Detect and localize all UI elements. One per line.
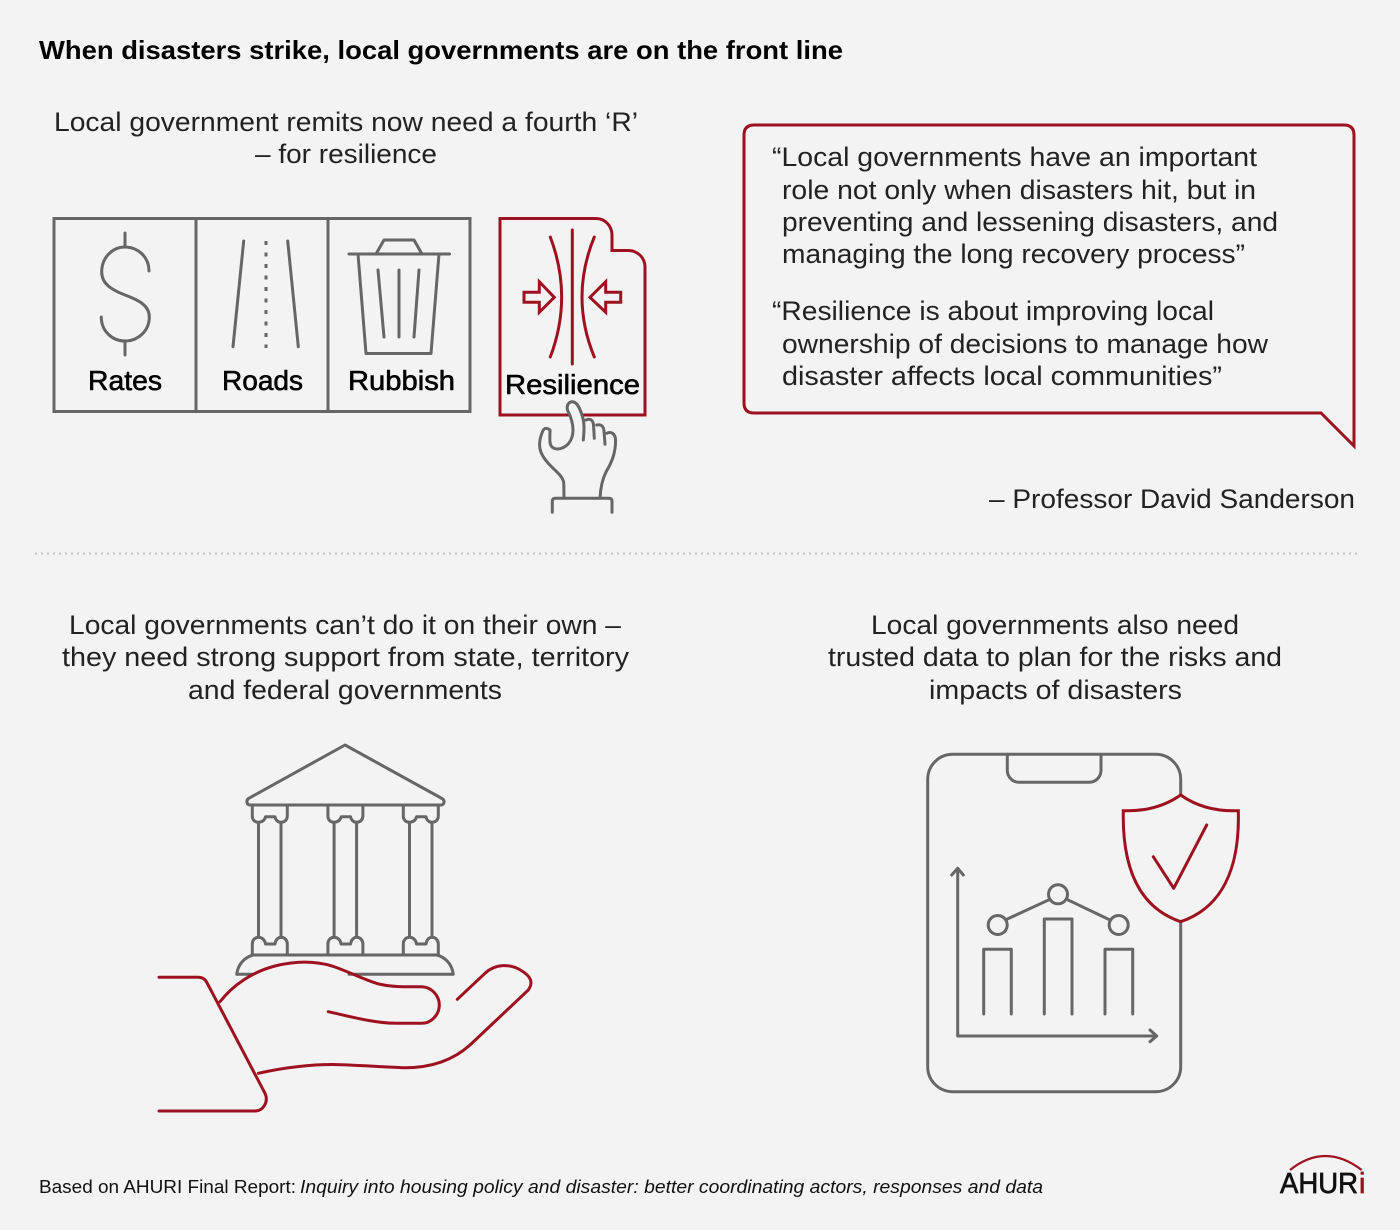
icon: government building <box>237 745 453 974</box>
heading: trusted data: trusted data to plan for the risks and <box>828 642 1282 672</box>
heading: fourth R for resilience: Local government remits now need a fourth ‘R’ <box>54 107 638 137</box>
icon: shield with check <box>1123 795 1238 922</box>
icon: dollar sign <box>101 233 149 355</box>
quote two: disaster affects local communities” <box>782 361 1222 391</box>
quote one: managing the long recovery process” <box>782 239 1245 269</box>
quote attribution: – Professor David Sanderson <box>989 484 1355 514</box>
heading: support from other governments: Local governments can’t do it on their own – <box>69 610 621 640</box>
label: Rates: Rates <box>88 365 162 396</box>
icon: road <box>233 241 298 348</box>
label: Resilience: Resilience <box>505 369 640 400</box>
label: Rubbish: Rubbish <box>348 365 455 396</box>
source note: Inquiry into housing policy and disaster: better coordinating actors, responses and data <box>300 1177 1043 1197</box>
icon: open hand <box>159 962 531 1111</box>
source note: Based on AHURI Final Report: <box>39 1177 296 1197</box>
heading: support from other governments <box>62 610 630 705</box>
panel: resilience card <box>500 218 645 415</box>
title: When disasters strike, local governments are on the front line <box>39 35 843 65</box>
icon: resilience pressure lines <box>550 230 594 364</box>
heading: fourth R for resilience <box>54 107 638 169</box>
quote two: ownership of decisions to manage how <box>782 329 1269 359</box>
heading: trusted data <box>828 610 1282 705</box>
quote one <box>772 142 1278 269</box>
heading: trusted data: Local governments also need <box>871 610 1239 640</box>
heading: support from other governments: they need strong support from state, territory <box>62 642 630 672</box>
label: Roads: Roads <box>222 365 303 396</box>
chart: bars with trend line <box>952 868 1157 1042</box>
quote two: “Resilience is about improving local <box>772 296 1214 326</box>
panel: three Rs boxes <box>54 218 470 412</box>
icon: inward arrows <box>524 282 621 312</box>
panel: speech bubble with quotes <box>744 125 1354 446</box>
heading: fourth R for resilience: – for resilience <box>255 139 437 169</box>
quote two <box>772 296 1269 391</box>
logo: AHURI <box>1280 1156 1365 1200</box>
quote one: role not only when disasters hit, but in <box>782 175 1256 205</box>
icon: clipboard <box>928 754 1181 1092</box>
logo: AHURI: AHUR <box>1280 1168 1358 1200</box>
quote one: “Local governments have an important <box>772 142 1258 172</box>
heading: trusted data: impacts of disasters <box>929 675 1182 705</box>
logo: AHURI: i <box>1359 1168 1365 1200</box>
icon: rubbish bin <box>349 240 450 354</box>
heading: support from other governments: and federal governments <box>188 675 502 705</box>
quote one: preventing and lessening disasters, and <box>782 207 1278 237</box>
icon: pointing hand <box>540 402 616 512</box>
